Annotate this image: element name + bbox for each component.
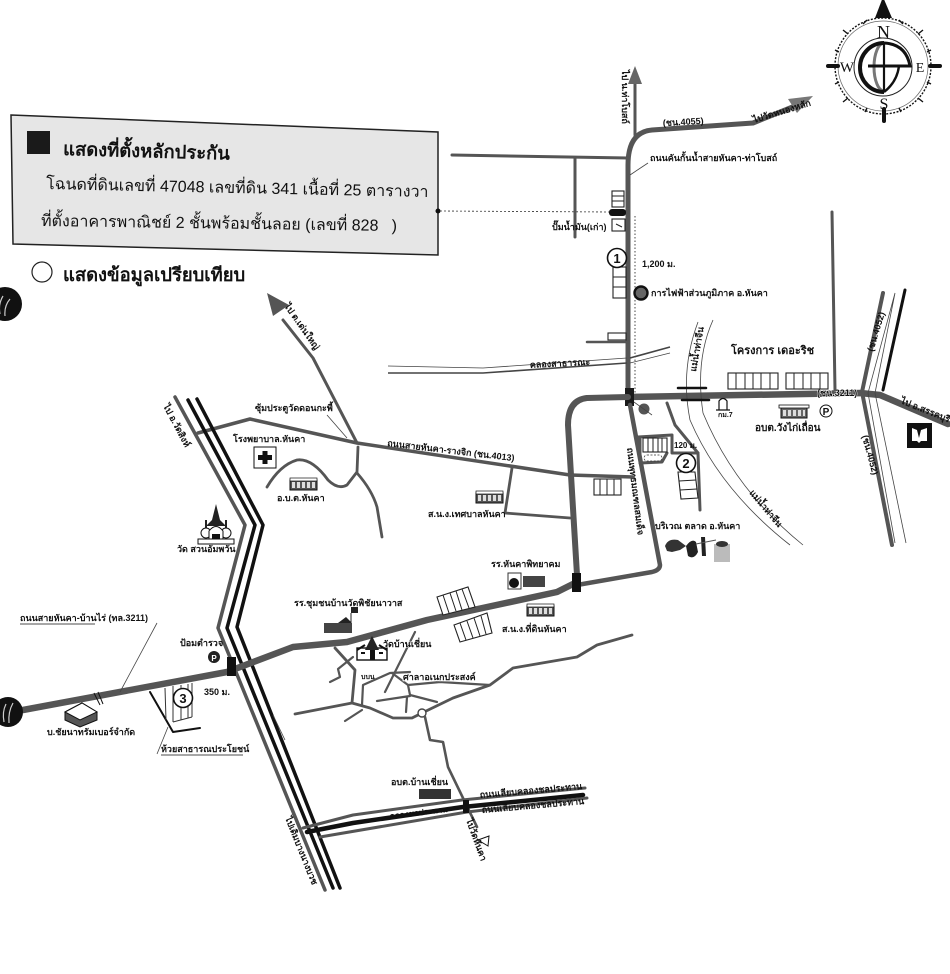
plot and circle 3: 3 (179, 691, 187, 706)
local road network (295, 632, 632, 721)
river Tha Chin: แม่น้ำท่าจีน (686, 325, 706, 372)
plot area and circle 2: 120 ม. (674, 441, 697, 450)
road to Tha Pho: arrow north (620, 66, 642, 135)
Han Kha Phitthayakhom school (491, 559, 561, 589)
river Tha Chin (686, 320, 803, 545)
old fuel pump: ปั๊มน้ำมัน(เก่า) (552, 220, 607, 232)
canal: คลองสาธารณะ (530, 357, 591, 370)
junction block east (572, 573, 581, 592)
main highway east 3211 (628, 388, 950, 425)
compass rose: E (916, 61, 924, 76)
junction block on main road (227, 657, 236, 676)
legend line 2: ที่ตั้งอาคารพาณิชย์ 2 ชั้นพร้อมชั้นลอย (เลขที่ 828 ) (41, 209, 397, 235)
triple highway: ไป อ.วัดสิงห์ (161, 401, 193, 449)
logo black square (907, 423, 932, 448)
small side road with building (587, 333, 628, 342)
Chainat Rubber factory: บ.ชัยนาทรัมเบอร์จำกัด (47, 726, 135, 737)
sub-district office Han Kha: อ.บ.ต.หันคา (277, 493, 325, 503)
district land office (502, 604, 567, 634)
irrigation canal road (303, 781, 587, 837)
Wat Ban Chian (357, 636, 432, 660)
district land office: ส.น.ง.ที่ดินหันคา (502, 622, 567, 634)
north side road (832, 212, 835, 390)
PEA office: การไฟฟ้าส่วนภูมิภาค อ.หันคา (651, 287, 768, 299)
road: Phra Sri Ariya (568, 397, 660, 585)
road 4013 to Ratchakhram: ซุ้มประตูวัดดอนกะพี้ (255, 401, 334, 414)
main highway east 3211: (ชน.3211) (817, 388, 857, 398)
bridge bars (678, 388, 709, 400)
Wat Suan Um Phawan (177, 504, 236, 554)
legend heading: แสดงที่ตั้งหลักประกัน (63, 135, 231, 164)
road 4052: (ชน.4052) (860, 434, 880, 476)
Wang Kai Thuean SAO: อบต.วังไก่เถื่อน (755, 420, 821, 434)
river Tha Chin: แม่น้ำท่าจีน (747, 487, 786, 530)
plot and circle 3 (150, 683, 230, 732)
plot area and circle 2: 2 (682, 456, 690, 471)
local road network: บบน (361, 674, 375, 681)
police box (180, 638, 223, 663)
road: Phra Sri Ariya: ถนนพุทธมณฑลสมเด็จ (624, 447, 648, 536)
local road network: ศาลาอเนกประสงค์ (403, 671, 476, 682)
km 7 marker (716, 398, 733, 419)
irrigation canal road: คลองชลประทาน (389, 805, 449, 821)
road 4013 to Ratchakhram (198, 293, 633, 477)
Wang Kai Thuean SAO (755, 405, 821, 434)
triple highway: ไปเดิมบางนางบวช (283, 814, 321, 886)
road south to Wat Han Kha: ไปวัดหันคา (464, 816, 490, 862)
leader line from legend to site (436, 208, 609, 214)
Han Kha Phitthayakhom school: รร.หันคาพิทยาคม (491, 559, 561, 569)
public utility swamp label: ห้วยสาธารณประโยชน์ (161, 743, 250, 754)
Chainat Rubber factory (47, 703, 135, 737)
market area (655, 521, 740, 562)
public utility swamp label (157, 727, 250, 755)
compass rose: S (880, 96, 888, 113)
municipal school: ส.น.ง.เทศบาลหันคา (428, 509, 506, 519)
canal (388, 347, 670, 373)
left edge logo top (0, 287, 22, 321)
road 4052 (860, 290, 906, 545)
left edge logo bottom (0, 697, 23, 727)
road 4055 with arrow: (ชน.4055) (663, 116, 704, 128)
main road west Han Kha - Ban Rai 3211 (20, 572, 652, 710)
main highway east 3211: ไป อ.สรรคบุรี (898, 394, 950, 425)
dimension 1,200 m: 1,200 ม. (642, 259, 675, 269)
plot area and circle 2 (638, 403, 700, 510)
Wat Phichai school (294, 598, 403, 633)
irrigation canal road: ถนนเลียบคลองชลประทาน (481, 796, 585, 815)
road 4052: (ชน.4052) (865, 311, 887, 353)
road 4013 to Ratchakhram: ไป ต.เด่นใหญ่ (281, 300, 323, 352)
municipal school (428, 491, 506, 519)
compass rose (826, 0, 942, 123)
plot and circle 1 (608, 248, 626, 298)
gas station icon (820, 405, 832, 418)
hospital: โรงพยาบาล.หันคา (232, 433, 305, 444)
sub-district office Han Kha (277, 478, 325, 503)
irrigation canal road: ถนนเลียบคลองชลประทาน (479, 781, 583, 800)
Wat Phichai school: รร.ชุมชนบ้านวัดพิชัยนาวาส (294, 598, 403, 609)
Ban Chian SAO: อบต.บ้านเชี่ยน (391, 775, 449, 787)
km 7 marker: กม.7 (718, 412, 733, 419)
hospital (232, 433, 305, 468)
legend line 1: โฉนดที่ดินเลขที่ 47048 เลขที่ดิน 341 เนื้อที่ 25 ตารางวา (46, 172, 429, 201)
Ban Chian SAO (391, 775, 451, 799)
triple highway (161, 397, 340, 890)
project plots The Rich (728, 343, 828, 389)
compass rose: N (877, 22, 890, 42)
road 4055 with arrow (628, 96, 813, 397)
legend marker: black square (27, 131, 50, 154)
plot and circle 3: 350 ม. (204, 687, 230, 697)
old fuel pump (552, 219, 625, 232)
road 4055 with arrow: ไปวัดหนองหลัก (750, 97, 812, 125)
police box: P (211, 654, 217, 663)
embankment roads (452, 151, 777, 237)
plot near 4013 (594, 479, 621, 495)
comparison legend: แสดงข้อมูลเปรียบเทียบ (63, 264, 245, 287)
market area: บริเวณ ตลาด อ.หันคา (655, 521, 740, 531)
compass rose: W (840, 60, 855, 76)
local roads near hospital (267, 447, 570, 537)
road south to Wat Han Kha (425, 717, 490, 862)
legend panel (11, 115, 438, 255)
gas station icon: P (823, 407, 830, 418)
central plots (437, 587, 492, 642)
PEA office (634, 286, 768, 300)
road to Tha Pho: arrow north: ไป น.ท่าโบสถ์ (620, 69, 631, 124)
plot and circle 1: 1 (613, 251, 621, 266)
project plots The Rich: โครงการ เดอะริช (730, 343, 815, 357)
embankment roads: ถนนคันกั้นน้ำสายหันคา-ท่าโบสถ์ (650, 151, 777, 163)
police box: ป้อมตำรวจ (180, 638, 223, 648)
road 4013 to Ratchakhram: ถนนสายหันคา-รางจิก (ชน.4013) (387, 438, 515, 463)
Wat Ban Chian: วัดบ้านเชี่ยน (383, 637, 432, 649)
main road west Han Kha - Ban Rai 3211: ถนนสายหันคา-บ้านไร่ (ทล.3211) (20, 612, 148, 623)
site: plot and marker (609, 191, 626, 216)
site block south junction (625, 388, 652, 415)
Wat Suan Um Phawan: วัด สวนอัมพวัน (177, 544, 236, 554)
